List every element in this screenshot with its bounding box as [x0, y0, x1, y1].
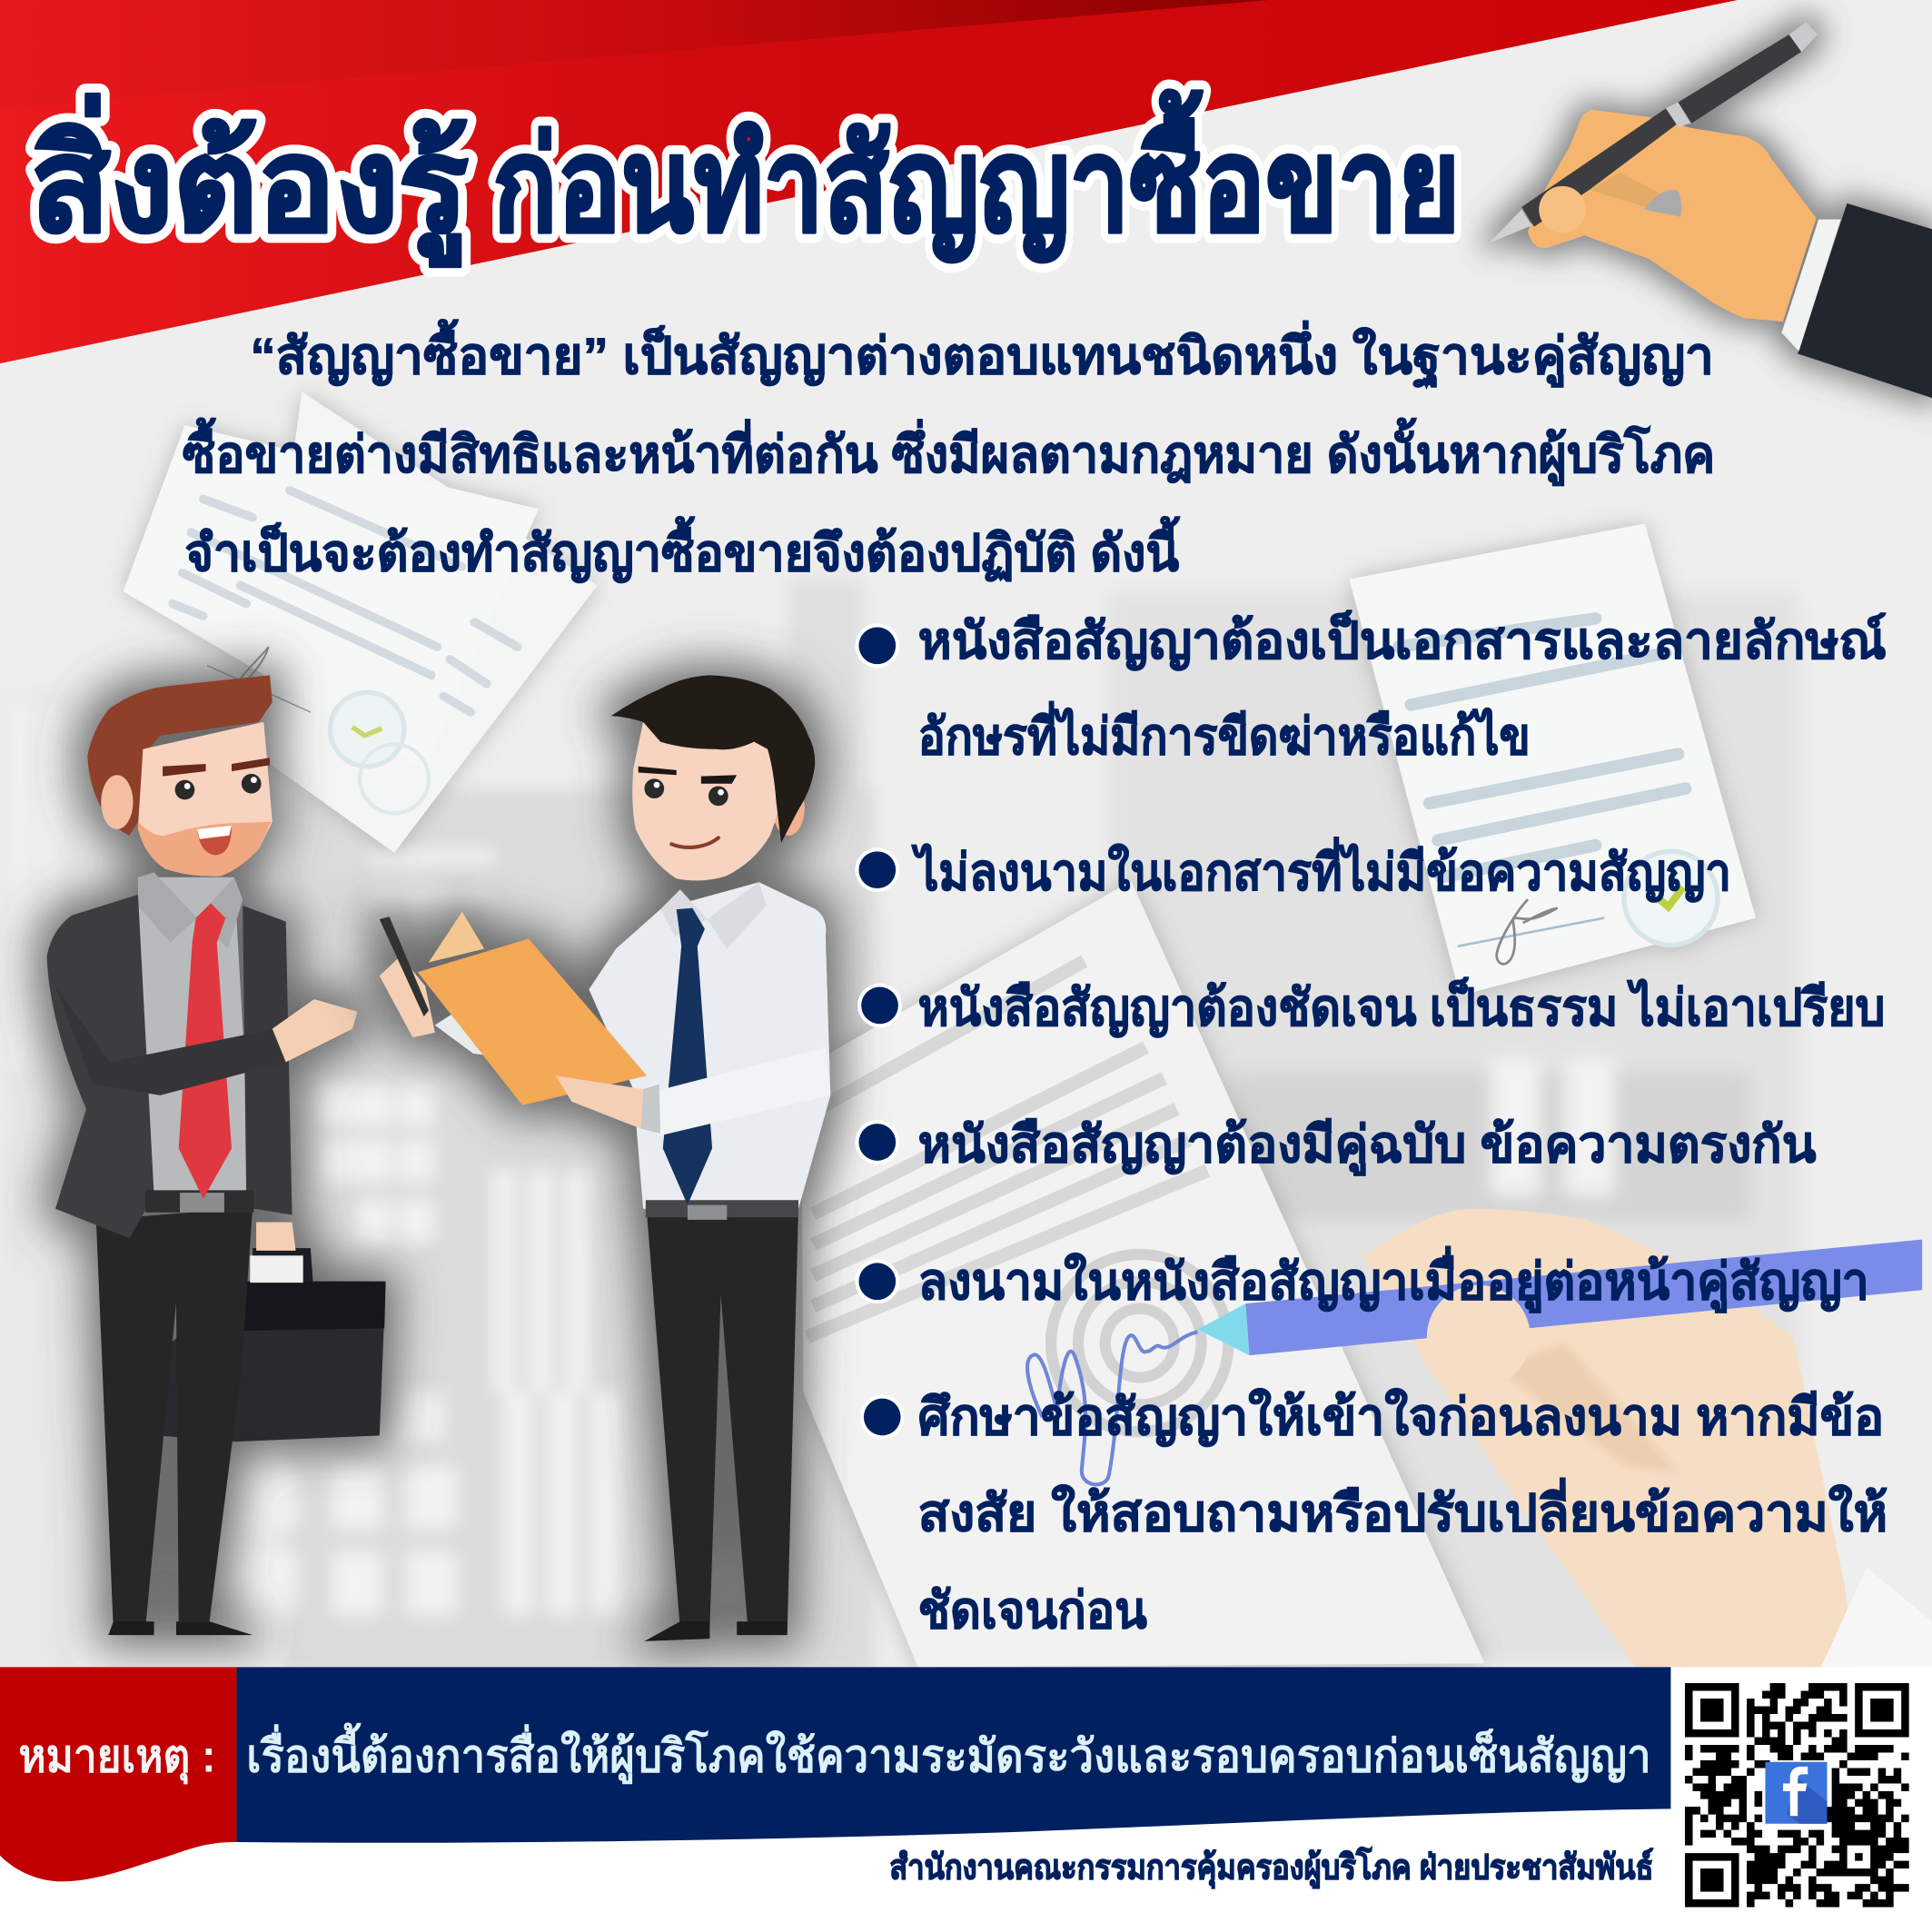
bullet 2: ไม่ลงนามในเอกสารที่ไม่มีข้อความสัญญา [911, 837, 1731, 902]
bullet 1: อักษรที่ไม่มีการขีดฆ่าหรือแก้ไข [918, 701, 1531, 765]
footer: red label ribbon [0, 1667, 236, 1881]
footer: navy note band [236, 1667, 1670, 1843]
bullet 5: ลงนามในหนังสือสัญญาเมื่ออยู่ต่อหน้าคู่สัญญา [918, 1246, 1869, 1313]
bullet 6 [860, 1387, 1887, 1639]
title: สิ่งต้องรู้ [31, 94, 468, 268]
document: lower centre sheet [801, 881, 1485, 1667]
left man: head [87, 675, 272, 877]
title: ก่อนทำสัญญาซื้อขาย [493, 90, 1460, 263]
intro paragraph [183, 319, 1715, 583]
facebook logo [1765, 1762, 1828, 1824]
title [31, 90, 1460, 268]
icon: hand holding blue pen [1027, 1209, 1932, 1669]
credit line: สำนักงานคณะกรรมการคุ้มครองผู้บริโภค ฝ่ายประชาสัมพันธ์ [889, 1847, 1653, 1889]
bullet 1 [855, 609, 1887, 765]
title: ก่อนทำสัญญาซื้อขาย [493, 90, 1460, 263]
intro paragraph: ซื้อขายต่างมีสิทธิและหน้าที่ต่อกัน ซึ่งมีผลตามกฎหมาย ดังนั้นหากผู้บริโภค [183, 418, 1715, 487]
bullet list [855, 609, 1887, 1639]
illustration: writing hand with pen [1490, 22, 1932, 398]
illustration: businessman with folder and navy tie [380, 675, 830, 1641]
right man: head [611, 675, 815, 880]
note text: เรื่องนี้ต้องการสื่อให้ผู้บริโภคใช้ความระมัดระวังและรอบครอบก่อนเซ็นสัญญา [246, 1723, 1651, 1785]
footer panel [0, 1667, 1932, 1932]
bullet 3: หนังสือสัญญาต้องชัดเจน เป็นธรรม ไม่เอาเปรียบ [918, 976, 1885, 1038]
bullet 6: สงสัย ให้สอบถามหรือปรับเปลี่ยนข้อความให้ [918, 1478, 1887, 1541]
bullet 6: ชัดเจนก่อน [918, 1582, 1147, 1639]
intro paragraph: จำเป็นจะต้องทำสัญญาซื้อขายจึงต้องปฏิบัติ ดังนี้ [184, 516, 1180, 583]
title: สิ่งต้องรู้ [31, 94, 468, 268]
bullet 1: หนังสือสัญญาต้องเป็นเอกสารและลายลักษณ์ [918, 609, 1887, 670]
QR code with facebook logo [1685, 1687, 1909, 1903]
bullet 6: ศึกษาข้อสัญญาให้เข้าใจก่อนลงนาม หากมีข้อ [918, 1387, 1884, 1447]
illustration: businessman with red tie and briefcase [47, 675, 386, 1635]
bullet 4: หนังสือสัญญาต้องมีคู่ฉบับ ข้อความตรงกัน [918, 1116, 1816, 1176]
intro paragraph: “สัญญาซื้อขาย” เป็นสัญญาต่างตอบแทนชนิดหนึ่ง ในฐานะคู่สัญญา [250, 319, 1714, 389]
note label: หมายเหตุ : [18, 1731, 215, 1785]
document: top-left sheets [124, 391, 598, 853]
document: right sheet [1349, 524, 1756, 996]
red header band [0, 0, 1738, 363]
